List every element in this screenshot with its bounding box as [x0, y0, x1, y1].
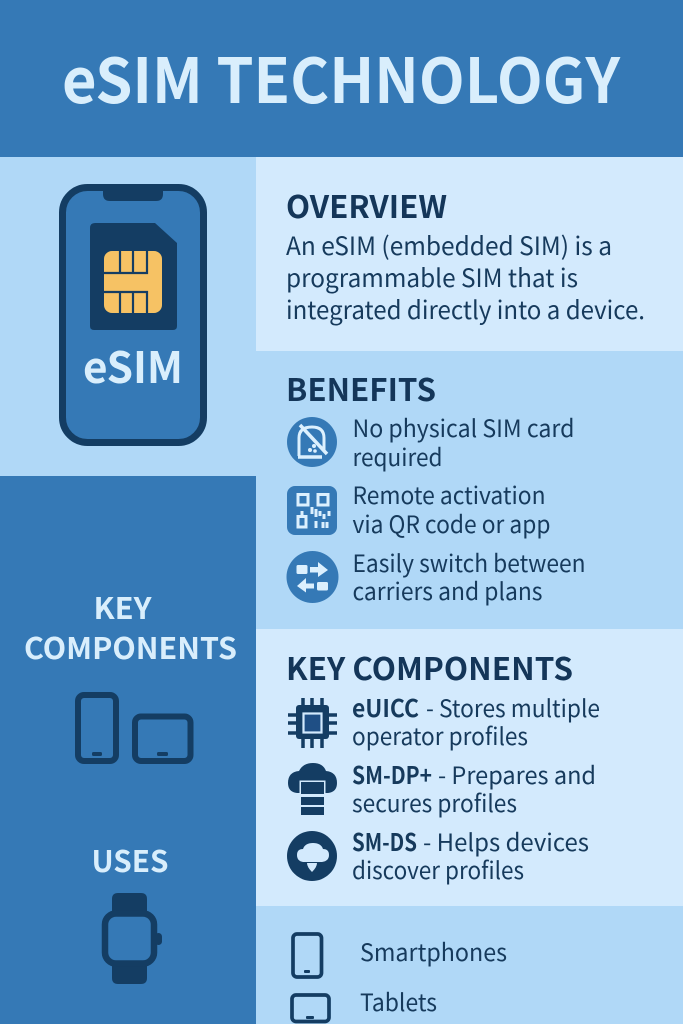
label: tablets: Tablets	[360, 983, 437, 1018]
icon: SM-DP+ cloud server	[288, 763, 337, 816]
component text: SM-DP+: SM-DP+	[352, 756, 432, 791]
label: smartphones: Smartphones	[360, 933, 507, 968]
component text: eUICC: eUICC	[352, 689, 419, 724]
component text: SM-DS: SM-DS	[352, 823, 417, 858]
title: eSIM TECHNOLOGY	[62, 31, 621, 121]
overview text: An eSIM (embedded SIM) is a	[286, 227, 612, 263]
icon: tablet outline	[135, 716, 190, 761]
benefit text: remote activation: Remote activation	[352, 476, 546, 511]
overview text	[286, 227, 645, 327]
panel: left column phone background	[0, 157, 256, 476]
overview text: programmable SIM that is	[286, 259, 578, 295]
benefit text: no physical SIM	[352, 409, 574, 473]
icon: no physical SIM	[287, 417, 337, 467]
benefit text: no physical SIM: required	[352, 438, 442, 473]
benefit text: no physical SIM: No physical SIM card	[352, 409, 574, 444]
icon: switch arrows	[286, 551, 338, 603]
panel: header	[0, 0, 683, 157]
left label: key components	[24, 584, 237, 668]
component text: SM-DP+: secures profiles	[352, 784, 517, 819]
icon: phone outline	[78, 695, 116, 761]
component text: SM-DS: - Helps devices	[423, 823, 589, 858]
panel: key components	[256, 629, 683, 906]
left label: key components: COMPONENTS	[24, 624, 237, 668]
benefit text: switch carriers: Easily switch between	[352, 544, 586, 579]
icon: tablet	[292, 995, 329, 1022]
left label: uses: USES	[92, 837, 168, 881]
benefit text: remote activation: via QR code or app	[352, 505, 550, 540]
panel: left column lower	[0, 476, 256, 1024]
icon: SM-DS cloud	[287, 831, 337, 881]
icon: phone with eSIM chip: eSIM	[83, 334, 183, 396]
icon: phone with eSIM chip	[62, 186, 204, 442]
panel: overview	[256, 157, 683, 351]
heading: key components: KEY COMPONENTS	[286, 644, 573, 689]
component text: eUICC	[352, 689, 600, 752]
icon: QR code	[287, 486, 337, 535]
heading: overview: OVERVIEW	[286, 182, 447, 227]
panel: uses list	[256, 906, 683, 1024]
component text: SM-DP+: - Prepares and	[438, 756, 596, 791]
benefit text: switch carriers: carriers and plans	[352, 572, 542, 607]
left label: key components: KEY	[94, 584, 152, 628]
icon: smartphone	[293, 934, 322, 977]
overview text: integrated directly into a device.	[286, 291, 645, 327]
component text: eUICC: operator profiles	[352, 717, 528, 752]
component text: SM-DS	[352, 823, 589, 886]
benefit text: switch carriers	[352, 544, 586, 607]
component text: SM-DP+	[352, 756, 596, 819]
benefit text: remote activation	[352, 476, 550, 540]
component text: eUICC: - Stores multiple	[426, 689, 600, 724]
component text: SM-DS: discover profiles	[352, 851, 524, 886]
heading: benefits: BENEFITS	[286, 365, 436, 410]
icon: eUICC chip	[288, 698, 337, 748]
panel: benefits	[256, 351, 683, 629]
icon: smartwatch	[105, 893, 162, 984]
